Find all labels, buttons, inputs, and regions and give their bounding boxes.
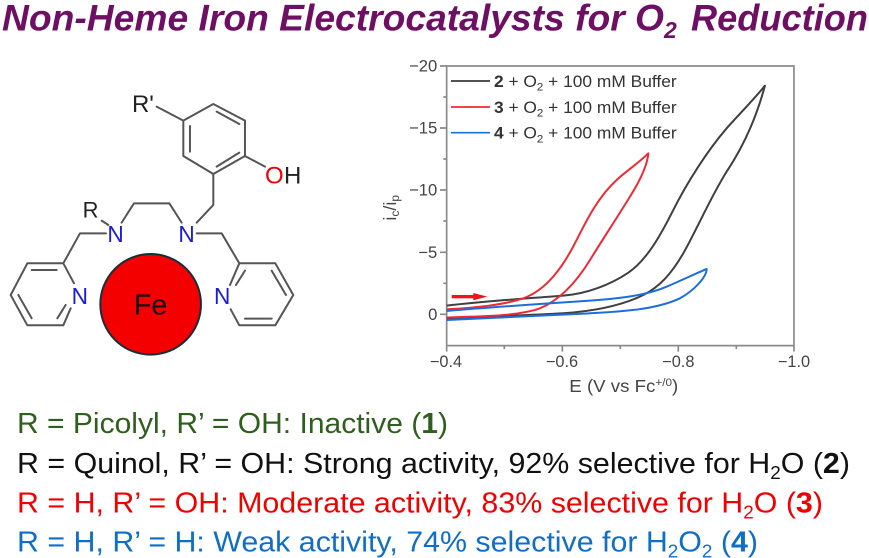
line: compound 2: O ( xyxy=(781,448,823,480)
legend xyxy=(451,72,677,145)
y-axis tick labels: −5 xyxy=(418,243,437,262)
legend entry: 2: 2 xyxy=(537,82,543,94)
line: compound 3: 2 xyxy=(743,502,754,522)
legend entry: 2 xyxy=(451,72,677,94)
y-axis tick labels: −15 xyxy=(409,119,437,138)
line: compound 1: R = Picolyl, R’ = OH: Inactive ( 1) xyxy=(17,408,448,440)
label: amine N left: N xyxy=(107,221,124,247)
y-axis title: /i xyxy=(380,202,400,211)
y-axis title: p xyxy=(388,195,402,202)
line: compound 2: R = Quinol, R’ = OH: Strong activity, 92% selective for H xyxy=(17,448,736,480)
legend entry: 4: 4 + O xyxy=(494,124,536,143)
description lines xyxy=(17,408,850,558)
line: compound 4: R = H, R’ = H: Weak activity, 74% selective for H xyxy=(17,526,639,558)
label: R: R xyxy=(83,197,99,222)
label: OH: O xyxy=(265,162,284,189)
legend entry: 3: + 100 mM Buffer xyxy=(543,98,677,117)
y-axis title: c xyxy=(388,211,402,217)
x-axis tick labels: −0.6 xyxy=(546,353,578,371)
chemical structure xyxy=(11,91,301,355)
label: OH xyxy=(265,162,301,189)
quinol ring and ligand bonds xyxy=(11,104,293,325)
x-axis title: ) xyxy=(672,376,678,396)
line: compound 4: 4) xyxy=(731,526,758,558)
red curve: compound 3 xyxy=(447,153,648,318)
title xyxy=(2,0,868,43)
x-axis tick labels: −1.0 xyxy=(778,353,810,371)
title: 2 xyxy=(663,17,677,43)
label: pyridine N left: N xyxy=(72,283,88,309)
blue curve: compound 4 xyxy=(447,269,707,320)
y-axis title: i xyxy=(380,217,400,221)
scan direction arrow xyxy=(452,293,487,300)
label: amine N right: N xyxy=(178,221,195,247)
legend entry: 4 xyxy=(451,124,677,145)
label: R prime: R' xyxy=(132,91,154,118)
line: compound 4: ( xyxy=(712,526,731,558)
line: compound 3: R = H, R’ = OH: Moderate activity, 83% selective for H xyxy=(17,488,710,520)
x-axis title: E (V vs Fc xyxy=(569,376,652,396)
x-axis tick labels xyxy=(430,353,810,371)
x-axis title: +/0 xyxy=(655,377,672,389)
line: compound 2: 2 xyxy=(770,463,781,483)
line: compound 2: 2) xyxy=(823,448,850,480)
legend entry: 4: + 100 mM Buffer xyxy=(543,124,677,143)
legend entry: 4: 2 xyxy=(537,133,543,145)
y-axis tick labels: −10 xyxy=(409,181,437,200)
legend entry: 2: 2 + O xyxy=(494,72,536,91)
black curve: compound 2 xyxy=(447,86,765,318)
x-axis tick labels: −0.4 xyxy=(430,353,462,371)
legend entry: 3 xyxy=(451,98,677,120)
x-axis tick labels: −0.8 xyxy=(662,353,694,371)
legend entry: 3: 2 xyxy=(537,108,543,120)
y-axis tick labels: −20 xyxy=(409,57,437,76)
iron atom: Fe xyxy=(134,289,167,321)
y-axis tick labels: 0 xyxy=(428,305,437,324)
line: compound 3: 3) xyxy=(796,488,823,520)
y-axis tick labels xyxy=(409,57,437,324)
cyclic voltammogram chart xyxy=(380,57,810,396)
label: OH: H xyxy=(284,162,301,189)
line: compound 4: O xyxy=(678,526,702,558)
legend entry: 3: 3 + O xyxy=(494,98,536,117)
label: pyridine N right: N xyxy=(214,283,230,309)
line: compound 3: O ( xyxy=(754,488,796,520)
iron atom xyxy=(100,254,201,355)
axes and ticks xyxy=(440,66,794,352)
legend entry: 2: + 100 mM Buffer xyxy=(543,72,677,91)
